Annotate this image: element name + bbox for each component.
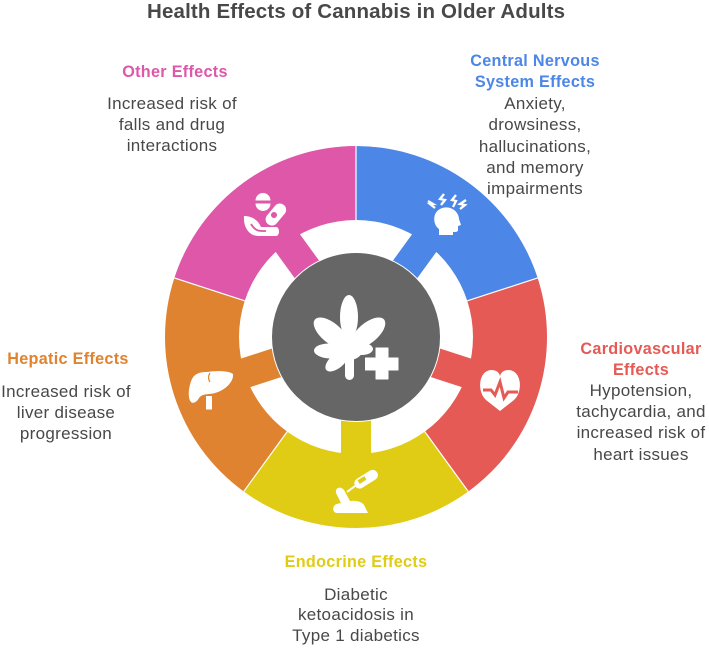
icon: glucose meter hand — [333, 468, 380, 513]
panel: hepatic text: progression — [20, 424, 112, 443]
panel: other effects text: Other Effects — [122, 63, 228, 81]
panel: central nervous system text: Central Nervous — [470, 52, 600, 70]
panel: central nervous system text: hallucinations, — [479, 137, 591, 156]
panel: hepatic text: liver disease — [17, 403, 115, 422]
panel: cardiovascular text: tachycardia, and — [576, 402, 706, 421]
panel: other effects text — [107, 63, 237, 155]
panel: central nervous system text: impairments — [487, 179, 583, 198]
panel: endocrine text: Diabetic — [324, 585, 388, 604]
panel: other effects text: Increased risk of — [107, 94, 237, 113]
panel: cardiovascular text: Hypotension, — [590, 381, 692, 400]
center circle — [272, 252, 440, 422]
panel: hepatic text — [1, 350, 131, 443]
icon: head with lightning — [428, 194, 466, 235]
panel: cardiovascular text: Effects — [613, 361, 669, 379]
panel: central nervous system text: and memory — [486, 158, 584, 177]
segment: hepatic — [165, 278, 287, 492]
title: Health Effects of Cannabis in Older Adults — [147, 0, 565, 23]
icon: liver — [189, 371, 233, 410]
panel: endocrine text — [285, 553, 427, 645]
segment: endocrine — [244, 418, 468, 528]
panel: central nervous system text: System Effects — [475, 73, 595, 91]
panel: endocrine text: ketoacidosis in — [298, 605, 414, 624]
panel: cardiovascular text: heart issues — [593, 445, 689, 464]
panel: central nervous system text: Anxiety, — [504, 94, 566, 113]
panel: cardiovascular text: Cardiovascular — [580, 340, 702, 358]
panel: other effects text: falls and drug — [119, 115, 225, 134]
icon: hand with pills — [244, 193, 289, 236]
panel: endocrine text: Endocrine Effects — [285, 553, 427, 571]
segment: other — [174, 146, 356, 301]
panel: other effects text: interactions — [127, 136, 217, 155]
panel: central nervous system text: drowsiness, — [488, 115, 582, 134]
segment separators — [174, 146, 538, 492]
segment: central nervous system — [356, 146, 538, 301]
icon: heart with pulse — [480, 370, 520, 411]
icon: cannabis leaf with plus — [308, 295, 398, 380]
segment: cardiovascular — [425, 278, 547, 492]
panel: endocrine text: Type 1 diabetics — [292, 626, 420, 645]
wheel chart — [165, 146, 547, 528]
panel: cardiovascular text: increased risk of — [577, 423, 705, 442]
panel: central nervous system text — [470, 52, 600, 198]
panel: hepatic text: Increased risk of — [1, 382, 131, 401]
panel: cardiovascular text — [576, 340, 706, 464]
panel: hepatic text: Hepatic Effects — [7, 350, 129, 368]
